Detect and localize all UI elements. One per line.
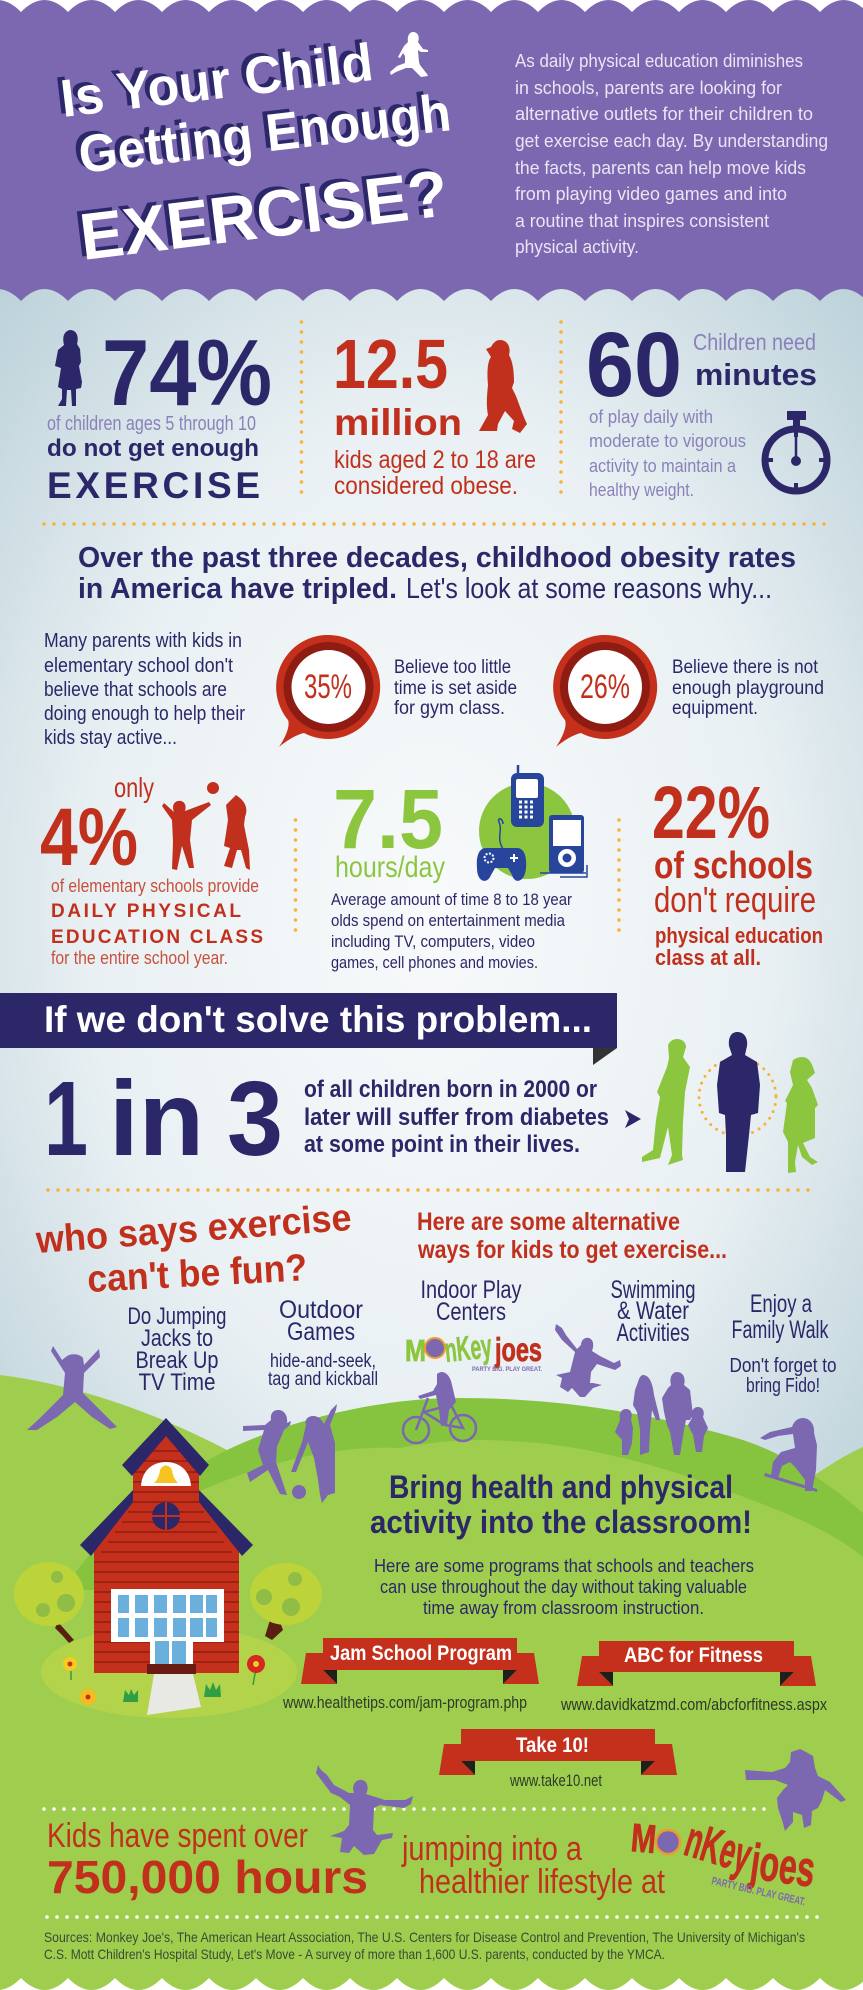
- stat: only 4 percent: [40, 772, 263, 968]
- stat: 7.5 hours per day: hours/day: [335, 851, 445, 884]
- title: Is Your Child: [52, 30, 371, 126]
- intro text: the facts, parents can help move kids: [515, 158, 806, 178]
- grass: [123, 1689, 138, 1702]
- logo: Monkey Joe's small: nKey: [443, 1327, 494, 1370]
- icon: media devices: [477, 765, 587, 881]
- bottom scallop edge: [0, 1978, 863, 1990]
- hills: [0, 1375, 863, 1990]
- heading: who says exercise can't be fun: [34, 1197, 353, 1301]
- heading: alternative ways: ways for kids to get exercise...: [417, 1236, 727, 1264]
- text: outdoor games: Games: [287, 1318, 355, 1346]
- ribbon: Jam School Program: Jam School Program: [330, 1642, 512, 1665]
- icon: family walking: [615, 1372, 708, 1455]
- text: jumping jacks: Do Jumping: [128, 1303, 226, 1330]
- stat: 60 minutes: 60: [586, 314, 682, 416]
- logo: Monkey Joe's large: joes: [747, 1833, 819, 1898]
- stat: only 4 percent: DAILY PHYSICAL: [51, 901, 241, 922]
- stat: 12.5 million: million: [334, 402, 462, 443]
- logo: Monkey Joe's small: PARTY BIG. PLAY GREAT.: [472, 1367, 542, 1373]
- illustration: school house: [14, 1418, 322, 1718]
- heading: who says exercise can't be fun: who says exercise: [34, 1197, 353, 1262]
- sources: C.S. Mott Children's Hospital Study, Let's Move - A survey of more than 1,600 U.S. parents, conducted by the YMCA.: [44, 1946, 665, 1962]
- building: [94, 1432, 239, 1673]
- stat: 22 percent: 22%: [652, 771, 770, 854]
- stat: 74 percent: do not get enough: [47, 435, 259, 462]
- stat: 7.5 hours per day: [331, 765, 587, 972]
- text: outdoor games: [268, 1296, 378, 1390]
- text block: parents: doing enough to help their: [44, 703, 245, 725]
- text: playground: Believe there is not: [672, 657, 819, 678]
- text block: parents: Many parents with kids in: [44, 630, 242, 652]
- stat: 60 minutes: minutes: [695, 357, 817, 392]
- text block: parents: elementary school don't: [44, 655, 233, 677]
- text: jumping jacks: [128, 1303, 226, 1396]
- icon: playing children: [162, 782, 250, 870]
- stat: 74 percent: of children ages 5 through 10: [47, 413, 256, 435]
- closing statement: [47, 1817, 665, 1903]
- title: Is Your Child: [57, 33, 376, 129]
- heading: classroom: activity into the classroom!: [370, 1504, 752, 1540]
- stat: 12.5 million: considered obese.: [334, 472, 518, 500]
- stat: 60 minutes: of play daily with: [589, 407, 713, 427]
- heading: obesity rates: Over the past three decades, childhood obesity rates: [78, 542, 796, 574]
- door: [150, 1640, 193, 1665]
- path: [147, 1674, 201, 1715]
- title: Getting Enough: [76, 83, 454, 185]
- stat: only 4 percent: only: [114, 772, 154, 803]
- callout: 26 percent: [553, 635, 657, 747]
- heading: alternative ways: [417, 1208, 727, 1264]
- links: www.healthetips.com/jam-program.php: [282, 1693, 527, 1712]
- roof: [122, 1418, 209, 1476]
- heading: who says exercise can't be fun: can't be fun?: [86, 1247, 308, 1301]
- arrow: [625, 1110, 641, 1128]
- stat: 60 minutes: healthy weight.: [589, 480, 694, 500]
- icon: three children silhouettes: [642, 1032, 818, 1173]
- stat: only 4 percent: of elementary schools provide: [51, 876, 259, 896]
- logo: Monkey Joe's small: M: [405, 1333, 426, 1368]
- icon: girl on bike: [403, 1372, 476, 1443]
- stat: 74 percent: [47, 320, 272, 506]
- sources: [44, 1929, 805, 1962]
- text: swimming: & Water: [617, 1297, 689, 1325]
- stat: 7.5 hours per day: 7.5: [333, 772, 443, 866]
- text: outdoor games: Outdoor: [279, 1296, 363, 1324]
- text: swimming: Activities: [616, 1319, 690, 1347]
- stat: 74 percent: 74%: [102, 320, 272, 425]
- text: family walk: Don't forget to: [730, 1355, 836, 1377]
- icon: skateboarder: [760, 1418, 817, 1492]
- stat: 22 percent: of schools: [654, 845, 813, 887]
- stat: only 4 percent: EDUCATION CLASS: [51, 927, 263, 948]
- stat: 7.5 hours per day: including TV, computers, video: [331, 932, 535, 951]
- stat: 60 minutes: activity to maintain a: [589, 456, 737, 476]
- callout: 35 percent: [276, 635, 380, 747]
- stat: 1 in 3: of all children born in 2000 or: [304, 1076, 597, 1103]
- text: gym class: Believe too little: [394, 657, 511, 678]
- intro text: in schools, parents are looking for: [515, 78, 782, 98]
- ribbon: Take 10: Take 10!: [516, 1734, 589, 1757]
- stat: 22 percent: physical education: [655, 923, 823, 948]
- closing statement: healthier lifestyle at: [419, 1863, 665, 1901]
- icon: large squatting kid: [745, 1749, 846, 1831]
- text: outdoor games: tag and kickball: [268, 1369, 378, 1390]
- stat: 7.5 hours per day: olds spend on entertainment media: [331, 911, 565, 930]
- heading: obesity rates: in America have tripled.: [78, 573, 397, 605]
- stat: only 4 percent: 4%: [40, 792, 138, 883]
- text: jumping jacks: Jacks to: [141, 1325, 213, 1352]
- stat: 1 in 3: 1: [44, 1060, 88, 1178]
- text: family walk: Enjoy a: [750, 1290, 812, 1318]
- text: programs: time away from classroom instruction.: [423, 1598, 704, 1618]
- text: gym class: time is set aside: [394, 678, 517, 699]
- stat: 22 percent: class at all.: [655, 945, 761, 970]
- heading: classroom: Bring health and physical: [389, 1469, 733, 1505]
- stat: 22 percent: don't require: [654, 879, 816, 920]
- bell arch: [141, 1462, 191, 1486]
- text block: parents: kids stay active...: [44, 727, 177, 749]
- banner: if we don't solve: [0, 993, 617, 1065]
- text block: parents: believe that schools are: [44, 679, 227, 701]
- title: EXERCISE?: [71, 152, 447, 271]
- icon: toddler silhouette: [479, 340, 527, 433]
- logo: Monkey Joe's large: PARTY BIG. PLAY GREAT.: [710, 1875, 807, 1909]
- background gradient: [0, 280, 863, 1540]
- stat: only 4 percent: for the entire school year.: [51, 948, 228, 968]
- links: [282, 1693, 827, 1790]
- icon: stopwatch: [765, 411, 827, 491]
- round window: [152, 1502, 180, 1530]
- logo: Monkey Joe's large: M: [629, 1816, 658, 1862]
- ribbon: Jam School Program: [301, 1638, 539, 1684]
- links: www.take10.net: [509, 1771, 602, 1790]
- stat: 12.5 million: [333, 325, 536, 500]
- panel: header: [0, 0, 863, 301]
- text: family walk: [730, 1290, 836, 1397]
- banner: if we don't solve: If we don't solve this problem...: [44, 999, 592, 1040]
- text: playground: enough playground: [672, 678, 824, 699]
- stat: 1 in 3: later will suffer from diabetes: [304, 1104, 609, 1131]
- stat: 1 in 3: [44, 1060, 641, 1178]
- text: jumping jacks: Break Up: [136, 1347, 218, 1374]
- intro text: get exercise each day. By understanding: [515, 131, 828, 151]
- title: Getting Enough: [71, 80, 449, 182]
- stat: 7.5 hours per day: Average amount of time 8 to 18 year: [331, 890, 572, 909]
- text: swimming: Swimming: [610, 1276, 696, 1304]
- tree right: [250, 1563, 322, 1640]
- text: playground: [672, 657, 824, 719]
- ground: [41, 1626, 297, 1718]
- text: programs: Here are some programs that schools and teachers: [374, 1556, 754, 1576]
- logo: Monkey Joe's large: [629, 1811, 819, 1909]
- intro text: As daily physical education diminishes: [515, 51, 803, 71]
- closing statement: jumping into a: [401, 1830, 582, 1868]
- callout: 35 percent: 35%: [304, 668, 352, 706]
- text: programs: [374, 1556, 754, 1618]
- title: EXERCISE?: [76, 155, 452, 274]
- text: family walk: bring Fido!: [746, 1375, 820, 1397]
- icon: child silhouette: [55, 330, 82, 406]
- logo: Monkey Joe's small: joes: [494, 1331, 542, 1368]
- heading: obesity rates: [78, 542, 796, 605]
- icon: star jumper: [27, 1346, 117, 1430]
- text: programs: can use throughout the day without taking valuable: [380, 1577, 747, 1597]
- callout: 26 percent: 26%: [580, 668, 630, 706]
- text: family walk: Family Walk: [732, 1316, 829, 1344]
- stat: 1 in 3: at some point in their lives.: [304, 1131, 580, 1158]
- intro text: alternative outlets for their children to: [515, 104, 813, 124]
- logo: Monkey Joe's small: [405, 1327, 542, 1373]
- stat: 7.5 hours per day: games, cell phones and movies.: [331, 953, 538, 972]
- ribbon: ABC for Fitness: [577, 1641, 816, 1686]
- stat: 60 minutes: Children need: [693, 329, 816, 355]
- tree left: [14, 1562, 84, 1643]
- text: jumping jacks: TV Time: [138, 1369, 216, 1396]
- heading: alternative ways: Here are some alternative: [417, 1208, 680, 1236]
- stat: 12.5 million: kids aged 2 to 18 are: [334, 446, 536, 474]
- text: outdoor games: hide-and-seek,: [270, 1351, 376, 1372]
- closing statement: Kids have spent over: [47, 1817, 308, 1855]
- icon: soccer kids: [243, 1404, 337, 1503]
- logo: Monkey Joe's large: nKey: [679, 1811, 758, 1884]
- flowers: [71, 1668, 256, 1704]
- icon: large jumping boy: [316, 1765, 413, 1855]
- icon: jumping boy: [555, 1324, 621, 1397]
- intro text: physical activity.: [515, 237, 639, 257]
- stat: 60 minutes: [586, 314, 827, 500]
- text: gym class: [394, 657, 517, 719]
- stat: 1 in 3: 3: [227, 1060, 283, 1178]
- heading: obesity rates: Let's look at some reasons why...: [406, 573, 772, 605]
- stat: 60 minutes: moderate to vigorous: [589, 431, 746, 451]
- text: swimming: [610, 1276, 696, 1347]
- text: gym class: for gym class.: [394, 698, 505, 719]
- ribbon: Take 10: [439, 1729, 677, 1775]
- intro text: a routine that inspires consistent: [515, 211, 769, 231]
- text: indoor play: Indoor Play: [420, 1276, 522, 1304]
- orange dotted dividers: [44, 322, 825, 1190]
- stat: 22 percent: [652, 771, 823, 970]
- text block: parents: [44, 630, 245, 749]
- stat: 12.5 million: 12.5: [333, 325, 448, 403]
- text: indoor play: Centers: [436, 1298, 506, 1326]
- heading: classroom: [370, 1469, 752, 1540]
- text: playground: equipment.: [672, 698, 758, 719]
- text: indoor play: [420, 1276, 522, 1326]
- stat: 1 in 3: in: [109, 1060, 204, 1178]
- white dotted dividers: [44, 1809, 827, 1917]
- title: [52, 30, 454, 274]
- icon: running child: [390, 32, 428, 77]
- intro text: from playing video games and into: [515, 184, 787, 204]
- intro text: [515, 51, 828, 257]
- ribbon: ABC for Fitness: ABC for Fitness: [624, 1644, 763, 1667]
- closing statement: 750,000 hours: [47, 1851, 368, 1903]
- stat: 74 percent: EXERCISE: [47, 465, 260, 506]
- window: [111, 1589, 224, 1642]
